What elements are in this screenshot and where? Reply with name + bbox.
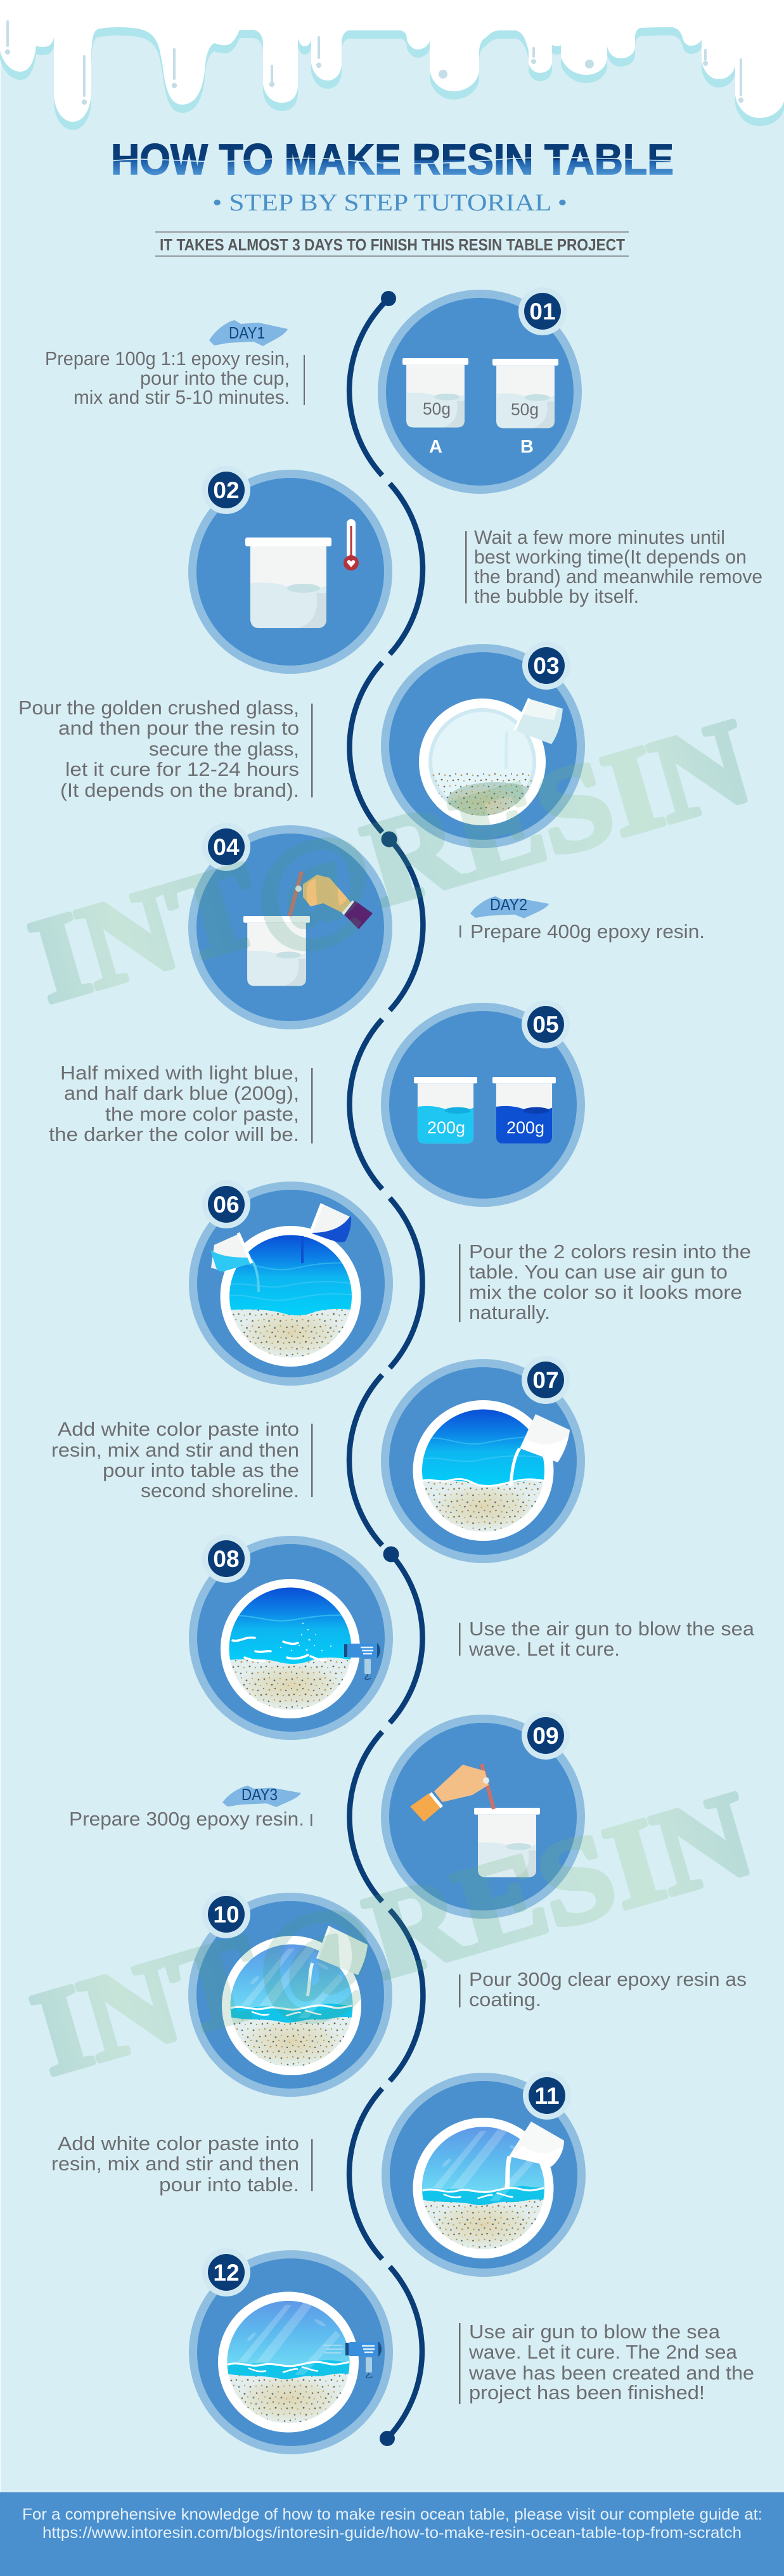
- timeline path: [349, 291, 423, 2446]
- subtitle: • STEP BY STEP TUTORIAL •: [212, 190, 567, 216]
- step 09 text: Prepare 300g epoxy resin.: [69, 1808, 304, 1830]
- step 04 text: Prepare 400g epoxy resin.: [470, 921, 705, 943]
- step 07 text: pour into table as the: [103, 1460, 299, 1481]
- pouring cup: [507, 2122, 564, 2188]
- day 3 tag: [222, 1785, 301, 1807]
- step 10 text: [459, 1969, 747, 2011]
- title: HOW TO MAKE RESIN TABLE: [111, 135, 674, 184]
- step 08 text: wave. Let it cure.: [468, 1639, 620, 1660]
- cup: [243, 916, 310, 986]
- badge 11: [523, 2071, 571, 2120]
- step 06 text: table. You can use air gun to: [469, 1261, 728, 1283]
- step 02 text: [465, 527, 762, 607]
- table with white wave: [413, 2118, 554, 2258]
- cups A and B: A: [429, 437, 442, 457]
- cup amounts: [427, 1118, 544, 1137]
- badge 09: [522, 1711, 570, 1760]
- icon: thermometer: [344, 519, 359, 570]
- step 03 text: [18, 697, 313, 801]
- dark blue cup: [492, 1077, 556, 1143]
- step 03 text: and then pour the resin to: [58, 718, 299, 739]
- finished table: [218, 2292, 359, 2433]
- step 06 text: naturally.: [469, 1302, 550, 1323]
- cups A and B: 50g: [511, 400, 539, 419]
- day 1 tag: DAY1: [229, 323, 265, 342]
- badge 02: [202, 466, 250, 514]
- badge 12: [202, 2248, 250, 2296]
- footer banner: [0, 2492, 784, 2576]
- hand stirring: [290, 872, 373, 929]
- step 02 text: the bubble by itself.: [474, 586, 639, 607]
- step 12 text: [459, 2321, 754, 2404]
- hand stirring: [410, 1764, 494, 1822]
- badge 06: [202, 1180, 250, 1228]
- badge 10: [202, 1890, 250, 1938]
- step 05 text: and half dark blue (200g),: [64, 1083, 299, 1104]
- watermark top: INT@RESIN: [18, 695, 764, 1028]
- step 05 text: the darker the color will be.: [49, 1124, 299, 1145]
- table with crushed glass: [419, 699, 546, 825]
- watermark bottom: INT@RESIN: [20, 1767, 766, 2101]
- step 08 text: Use the air gun to blow the sea: [469, 1618, 754, 1640]
- step 06 text: Pour the 2 colors resin into the: [469, 1241, 751, 1263]
- step 09: [69, 1711, 585, 1919]
- pouring cup: [511, 1414, 570, 1486]
- day 3 tag: DAY3: [241, 1785, 278, 1804]
- badge 05: [522, 1000, 570, 1048]
- table with blue gradient: [221, 1226, 361, 1367]
- cup amounts: 200g: [427, 1118, 465, 1137]
- step 11 text: resin, mix and stir and then: [51, 2153, 299, 2175]
- top white resin drips: [0, 0, 784, 130]
- badge 08: [202, 1535, 250, 1583]
- badge 03: [522, 641, 570, 690]
- step 02 text: Wait a few more minutes until: [474, 527, 725, 548]
- cup: [474, 1808, 540, 1877]
- step 10 text: coating.: [469, 1989, 541, 2011]
- step 03 text: Pour the golden crushed glass,: [18, 697, 299, 719]
- table with clear coating: [222, 1936, 361, 2075]
- step 07: [51, 1356, 585, 1563]
- badge 04: [202, 823, 250, 871]
- step 03 text: secure the glass,: [149, 738, 299, 760]
- step 06 text: mix the color so it looks more: [469, 1282, 742, 1303]
- badge 10: 10: [213, 1902, 240, 1928]
- step 07 text: second shoreline.: [141, 1480, 299, 1502]
- step 11: [51, 2071, 586, 2277]
- step 03: [18, 641, 585, 848]
- badge 08: 08: [213, 1546, 240, 1572]
- step 11 text: pour into table.: [159, 2174, 299, 2196]
- cups A and B: [402, 358, 558, 457]
- step 12: [189, 2248, 754, 2454]
- badge 03: 03: [533, 653, 560, 679]
- badge 04: 04: [213, 834, 240, 860]
- badge 07: [522, 1356, 570, 1404]
- light blue cup: [414, 1077, 477, 1143]
- step 08: [189, 1535, 754, 1740]
- step 01 text: Prepare 100g 1:1 epoxy resin,: [45, 348, 290, 370]
- step 02: [188, 466, 762, 674]
- badge 07: 07: [532, 1367, 559, 1393]
- step 12 text: Use air gun to blow the sea: [469, 2321, 720, 2343]
- day 1 tag: [209, 320, 288, 346]
- footer banner: https://www.intoresin.com/blogs/intoresin-guide/how-to-make-resin-ocean-table-top-from-scratch: [42, 2524, 742, 2542]
- step 10 text: Pour 300g clear epoxy resin as: [469, 1969, 747, 1990]
- step 07 text: Add white color paste into: [58, 1419, 299, 1440]
- step 10: [188, 1890, 747, 2097]
- step 01 text: pour into the cup,: [140, 368, 290, 389]
- step 01 text: mix and stir 5-10 minutes.: [74, 387, 290, 408]
- cup amounts: 200g: [506, 1118, 544, 1137]
- badge 01: 01: [529, 299, 556, 325]
- step 12 text: project has been finished!: [469, 2382, 705, 2404]
- step 05 text: [49, 1062, 313, 1145]
- badge 01: [518, 287, 567, 335]
- step 01: [45, 287, 582, 494]
- step 02 text: best working time(It depends on: [474, 546, 747, 568]
- step 08 text: [459, 1618, 754, 1660]
- badge 09: 09: [532, 1723, 559, 1749]
- day 2 tag: [470, 895, 549, 918]
- step 05 text: Half mixed with light blue,: [60, 1062, 299, 1084]
- step 07 text: [51, 1419, 313, 1502]
- step 01 text: [45, 348, 305, 408]
- badge 02: 02: [213, 477, 240, 503]
- pouring cups: [210, 1204, 351, 1292]
- pouring cup: [506, 699, 563, 769]
- step 05: [49, 1000, 585, 1207]
- badge 12: 12: [213, 2260, 240, 2286]
- step 04: [188, 823, 705, 1029]
- step 11 text: [51, 2133, 313, 2196]
- cups A and B: 50g: [423, 399, 451, 418]
- step 03 text: let it cure for 12-24 hours: [65, 759, 299, 780]
- cups A and B: B: [520, 437, 534, 457]
- step 07 text: resin, mix and stir and then: [51, 1439, 299, 1461]
- step 12 text: wave. Let it cure. The 2nd sea: [468, 2341, 737, 2363]
- step 06: [189, 1180, 751, 1386]
- duration banner: IT TAKES ALMOST 3 DAYS TO FINISH THIS RESIN TABLE PROJECT: [160, 235, 625, 254]
- icon: air gun: [344, 1644, 380, 1680]
- step 11 text: Add white color paste into: [58, 2133, 299, 2154]
- step 02 text: the brand) and meanwhile remove: [474, 566, 762, 588]
- step 03 text: (It depends on the brand).: [60, 780, 299, 801]
- badge 11: 11: [534, 2083, 560, 2109]
- pouring cup: [307, 1926, 368, 1996]
- step 12 text: wave has been created and the: [468, 2362, 754, 2384]
- table with sea wave: [221, 1579, 360, 1718]
- step 06 text: [459, 1241, 751, 1323]
- day 2 tag: DAY2: [490, 895, 527, 914]
- badge 05: 05: [532, 1012, 559, 1038]
- cup: [245, 538, 331, 628]
- badge 06: 06: [213, 1192, 240, 1218]
- icon: air gun with airflow: [323, 2342, 381, 2378]
- footer banner: For a comprehensive knowledge of how to make resin ocean table, please visit our complete guide at:: [22, 2506, 762, 2523]
- step 05 text: the more color paste,: [105, 1104, 299, 1125]
- table with white shoreline: [413, 1400, 554, 1541]
